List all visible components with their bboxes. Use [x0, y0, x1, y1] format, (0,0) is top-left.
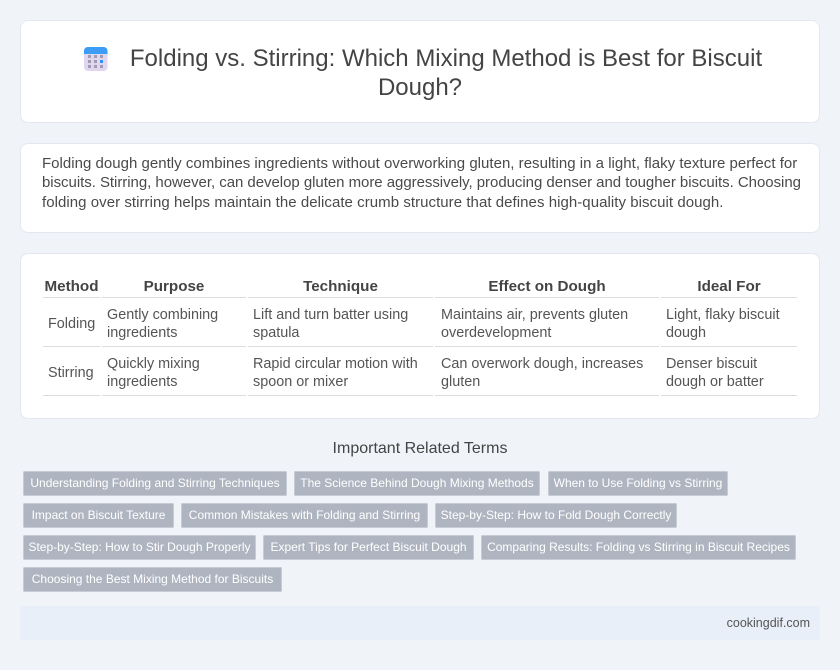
related term tags: Step-by-Step: How to Stir Dough Properly [28, 540, 251, 554]
related term tags: Understanding Folding and Stirring Techniques [30, 476, 280, 490]
title [130, 45, 762, 101]
related term tags: The Science Behind Dough Mixing Methods [300, 476, 534, 490]
comparison table: Quickly mixing [107, 356, 200, 372]
footer [20, 606, 820, 640]
heading: related terms: Important Related Terms [333, 440, 507, 457]
panel: title card [20, 20, 820, 123]
comparison table: ingredients [107, 325, 177, 341]
related term tags: Impact on Biscuit Texture [32, 508, 165, 522]
comparison table: Ideal For [697, 278, 761, 295]
related term tags [23, 471, 796, 592]
comparison table: overdevelopment [441, 325, 551, 341]
comparison table: Rapid circular motion with [253, 356, 418, 372]
title: Folding vs. Stirring: Which Mixing Method is Best for Biscuit [130, 45, 762, 72]
comparison table: ingredients [107, 374, 177, 390]
comparison table: Light, flaky biscuit [666, 307, 780, 323]
title: Dough? [378, 74, 462, 101]
comparison table: Lift and turn batter using [253, 307, 408, 323]
related term tags: Comparing Results: Folding vs Stirring in Biscuit Recipes [487, 540, 790, 554]
comparison table: Gently combining [107, 307, 218, 323]
comparison table: dough [666, 325, 706, 341]
panel: comparison table [20, 253, 820, 419]
related term tags: Step-by-Step: How to Fold Dough Correctly [441, 508, 671, 522]
related term tags: Choosing the Best Mixing Method for Biscuits [32, 572, 273, 586]
panel: intro [20, 143, 820, 233]
comparison table: Effect on Dough [488, 278, 606, 295]
comparison table: Technique [303, 278, 378, 295]
intro text: folding over stirring helps maintain the delicate crumb structure that defines high-quality biscuit dough. [42, 194, 724, 211]
comparison table: spatula [253, 325, 299, 341]
comparison table: spoon or mixer [253, 374, 348, 390]
icon: calendar [84, 47, 108, 71]
comparison table: Purpose [144, 278, 204, 295]
comparison table [43, 278, 797, 396]
comparison table: Method [44, 278, 98, 295]
comparison table: gluten [441, 374, 480, 390]
related term tags: Common Mistakes with Folding and Stirring [189, 508, 420, 522]
footer source text: cookingdif.com [727, 616, 810, 630]
comparison table: Folding [48, 316, 95, 332]
related term tags: Expert Tips for Perfect Biscuit Dough [270, 540, 467, 554]
intro text: Folding dough gently combines ingredients without overworking gluten, resulting in a light, flaky texture perfect for [42, 155, 797, 172]
related term tags: When to Use Folding vs Stirring [554, 476, 722, 490]
comparison table: Can overwork dough, increases [441, 356, 643, 372]
comparison table: Stirring [48, 365, 94, 381]
comparison table: Denser biscuit [666, 356, 757, 372]
comparison table: dough or batter [666, 374, 764, 390]
intro text: biscuits. Stirring, however, can develop gluten more aggressively, producing denser and tougher biscuits. Choosing [42, 174, 801, 191]
intro text [42, 155, 801, 211]
comparison table: Maintains air, prevents gluten [441, 307, 628, 323]
